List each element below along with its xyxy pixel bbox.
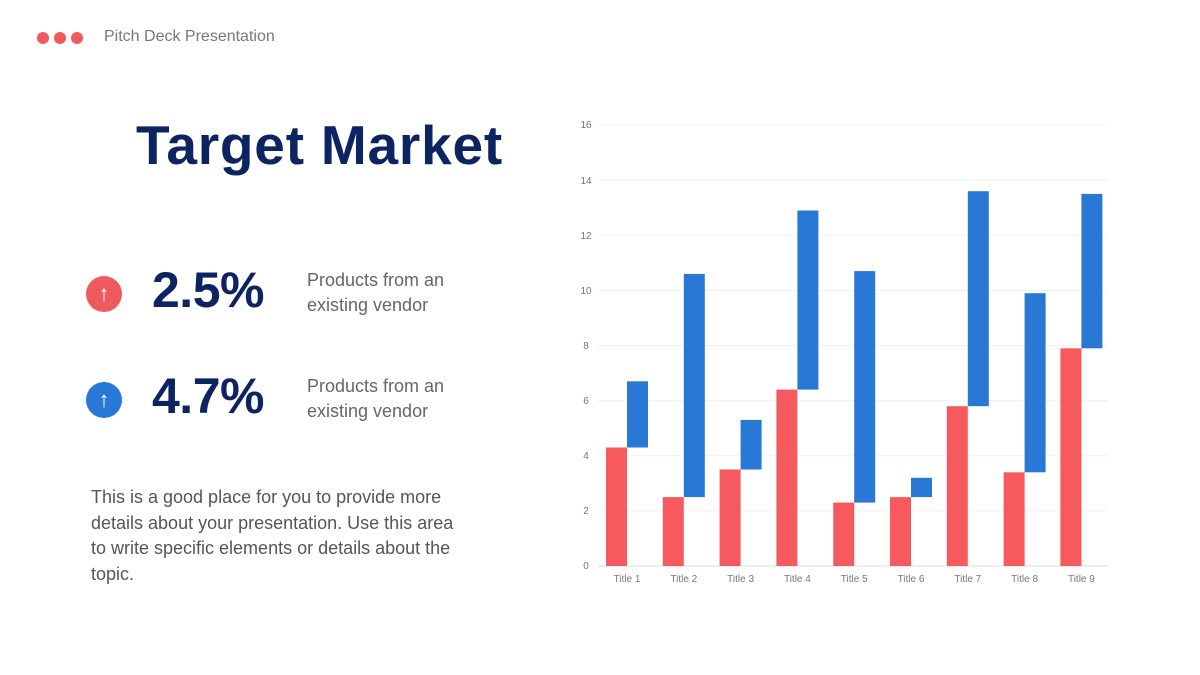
stat 2 [86,368,444,424]
description paragraph: to write specific elements or details about the topic. [91,538,450,584]
y axis labels [580,120,592,572]
x axis labels: Title 5 [841,574,868,585]
x axis labels: Title 1 [614,574,641,585]
red bars [606,348,1081,566]
y axis labels: 4 [583,451,589,462]
description paragraph [91,487,454,584]
blue bars [627,191,1102,503]
title: Target Market [136,114,503,176]
stat 1 [86,262,444,318]
header dots [37,32,83,44]
x axis labels [614,574,1095,585]
icon: blue up arrow [86,382,122,418]
value 4.7%: 4.7% [152,368,264,424]
stat 1 label: Products from an existing vendor [307,270,444,315]
y axis labels: 8 [583,341,589,352]
y axis labels: 16 [580,120,592,131]
x axis labels: Title 3 [727,574,754,585]
x axis labels: Title 8 [1011,574,1038,585]
stat 2 label: Products from an existing vendor [307,376,444,421]
x axis labels: Title 6 [898,574,925,585]
y axis labels: 14 [580,176,592,187]
bar chart [580,120,1108,585]
y axis labels: 12 [580,231,592,242]
icon: blue up arrow: ↑ [98,387,110,412]
y axis labels: 6 [583,396,589,407]
header text: Pitch Deck Presentation [104,28,275,45]
value 2.5%: 2.5% [152,262,264,318]
y axis labels: 0 [583,561,589,572]
description paragraph: This is a good place for you to provide more details about your presentation. Use this area [91,487,453,532]
icon: red up arrow [86,276,122,312]
y axis labels: 10 [580,286,592,297]
x axis labels: Title 7 [954,574,982,585]
icon: red up arrow: ↑ [98,281,110,306]
x axis labels: Title 9 [1068,574,1095,585]
x axis labels: Title 2 [670,574,698,585]
y axis labels: 2 [583,506,589,517]
x axis labels: Title 4 [784,574,811,585]
